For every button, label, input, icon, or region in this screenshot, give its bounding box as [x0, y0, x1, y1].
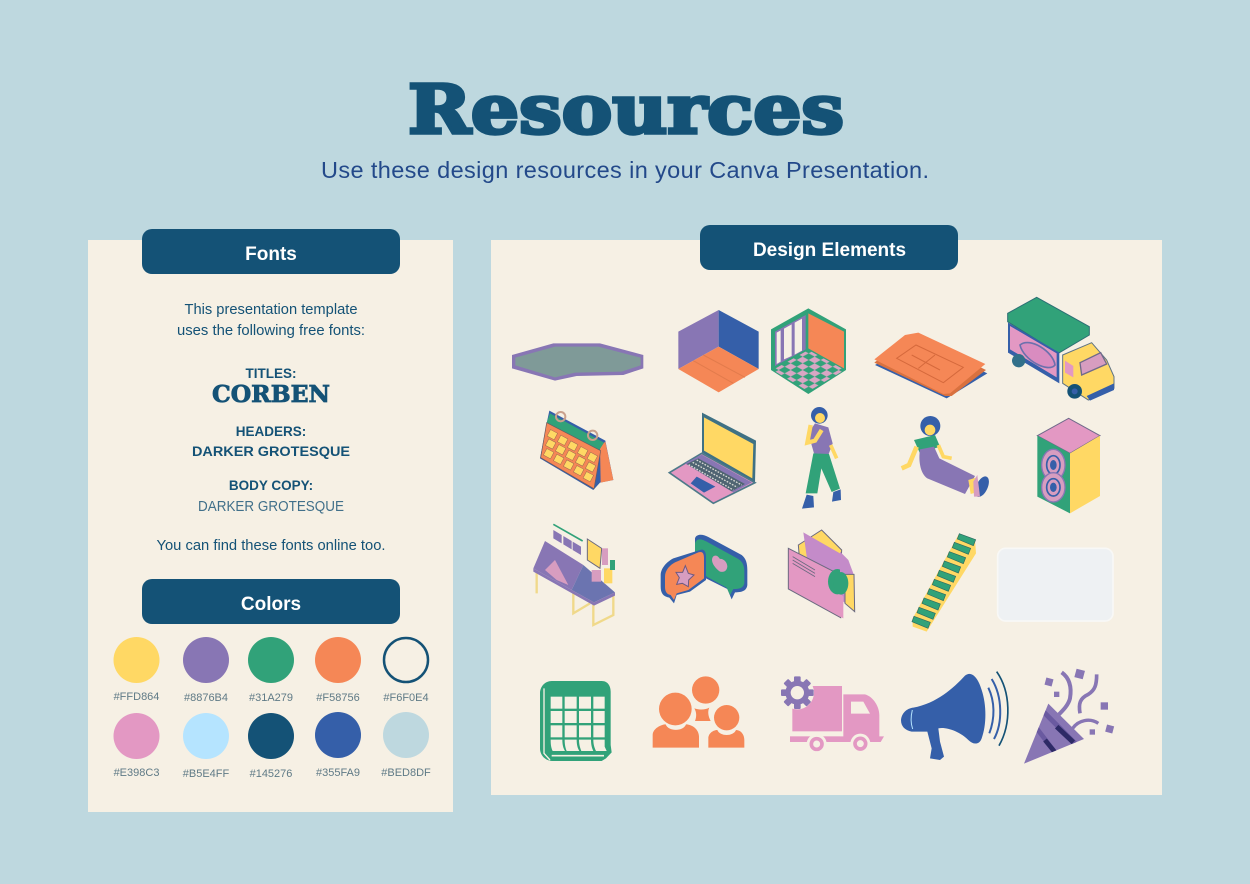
heading: fonts [142, 229, 400, 274]
color swatches: #B5E4FF [183, 768, 230, 780]
text block: headers font [192, 424, 350, 459]
text block: headers font: DARKER GROTESQUE [192, 444, 350, 459]
icon: open envelope folder [788, 530, 847, 618]
icon: pink truck cab [840, 694, 884, 754]
text block: headers font: HEADERS: [236, 424, 306, 439]
icon: orange people group [653, 676, 744, 748]
color swatches: #145276 [250, 768, 292, 780]
color swatches: #355FA9 [316, 767, 360, 779]
icon: desk calendar [540, 411, 613, 490]
icons row 1 and 2 left [512, 308, 846, 509]
text block: titles font: CORBEN [212, 381, 330, 408]
icon: sitting person [902, 416, 992, 499]
icon: green calendar [540, 681, 612, 761]
icon: isometric desk [533, 524, 615, 625]
icon: laptop [669, 413, 756, 503]
icon: green staircase [912, 534, 976, 632]
icon: hexagonal platform [512, 343, 643, 381]
icon: isometric room purple [678, 310, 759, 392]
color swatches [114, 637, 431, 780]
text block: intro [177, 302, 365, 339]
icon: speaker box [1037, 418, 1100, 513]
text block: note: You can find these fonts online too. [156, 538, 386, 554]
icon: chat bubbles [661, 535, 747, 603]
text block: titles font: TITLES: [246, 366, 296, 381]
color swatches: #8876B4 [184, 692, 228, 704]
color swatches: #FFD864 [114, 691, 159, 703]
title: Resources [408, 70, 844, 149]
text block: body copy font: DARKER GROTESQUE [198, 499, 344, 515]
heading: design elements [700, 225, 958, 270]
text block: intro: This presentation template [184, 302, 358, 318]
icon: standing person [802, 407, 841, 509]
icon: delivery truck [1008, 297, 1114, 401]
icon: party popper [1024, 669, 1114, 764]
text block: titles font [212, 366, 330, 408]
subtitle: Use these design resources in your Canva Presentation. [321, 157, 929, 183]
text block: body copy font [198, 478, 344, 515]
color swatches: #F6F0E4 [383, 692, 429, 704]
color swatches: #F58756 [316, 692, 360, 704]
text block: body copy font: BODY COPY: [229, 478, 313, 493]
icon: megaphone [901, 672, 1008, 760]
panel: fonts and colors [88, 229, 453, 812]
heading: colors: Colors [241, 594, 301, 615]
text block: intro: uses the following free fonts: [177, 323, 365, 339]
color swatches: #E398C3 [114, 767, 159, 779]
icon: stack of floor plans [874, 333, 987, 398]
heading: design elements: Design Elements [753, 240, 906, 261]
icon: pink truck with gear [781, 676, 842, 754]
icon: blank rounded card [998, 548, 1113, 621]
color swatches: #31A279 [249, 692, 293, 704]
color swatches: #BED8DF [381, 767, 431, 779]
icon: isometric room with windows [771, 308, 846, 394]
heading: colors [142, 579, 400, 624]
panel: design elements [491, 225, 1162, 795]
icon: envelope folder side [834, 552, 855, 618]
heading: fonts: Fonts [245, 244, 297, 265]
